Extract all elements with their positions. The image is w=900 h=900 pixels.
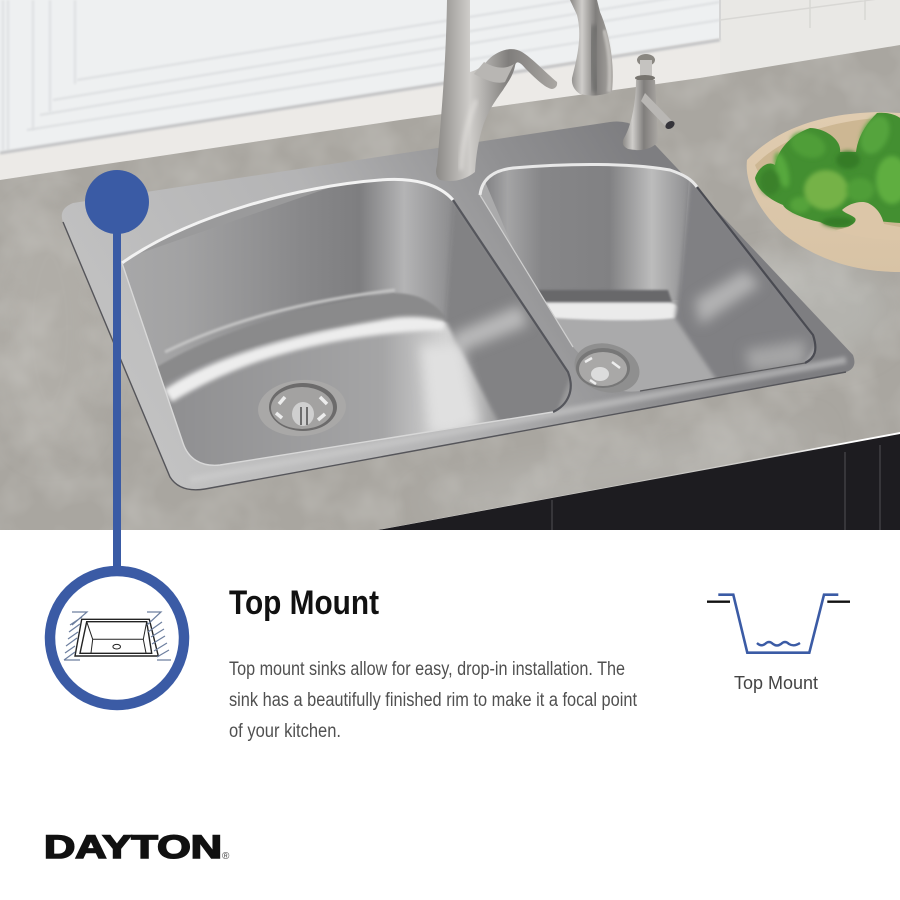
body text: Top mount sinks allow for easy, drop-in installation. The — [229, 659, 625, 680]
heading: Top Mount — [229, 584, 379, 622]
left basin — [115, 170, 572, 470]
callout: connector line — [113, 202, 121, 570]
wall and cabinet trim — [0, 0, 900, 200]
right drain — [574, 343, 640, 392]
salad bowl — [747, 111, 900, 272]
left drain — [258, 380, 340, 436]
faucet — [436, 0, 557, 181]
left back wall — [115, 170, 455, 367]
icon: mounted sink — [64, 612, 171, 660]
sink deck — [62, 121, 854, 490]
left right wall — [445, 198, 572, 425]
cabinet — [378, 434, 900, 530]
callout: pointer dot — [85, 170, 149, 234]
logo: Dayton: DAYTON — [44, 829, 222, 865]
body text — [229, 659, 638, 742]
right side wall — [675, 175, 820, 385]
pull-down spout — [570, 0, 613, 96]
right basin — [478, 164, 820, 392]
photo: kitchen sink — [0, 0, 900, 530]
left basin floor — [170, 321, 494, 462]
soap dispenser — [623, 54, 676, 150]
salad servers — [836, 202, 900, 240]
body text: of your kitchen. — [229, 721, 341, 742]
callout: circle with sink icon — [50, 571, 184, 705]
right back wall — [478, 165, 690, 300]
body text: sink has a beautifully finished rim to make it a focal point — [229, 690, 638, 711]
lettuce — [755, 111, 900, 227]
icon: top mount cross-section — [707, 595, 850, 653]
icon label: Top Mount — [734, 673, 818, 693]
countertop — [0, 40, 900, 530]
logo: Dayton: ® — [222, 851, 230, 862]
